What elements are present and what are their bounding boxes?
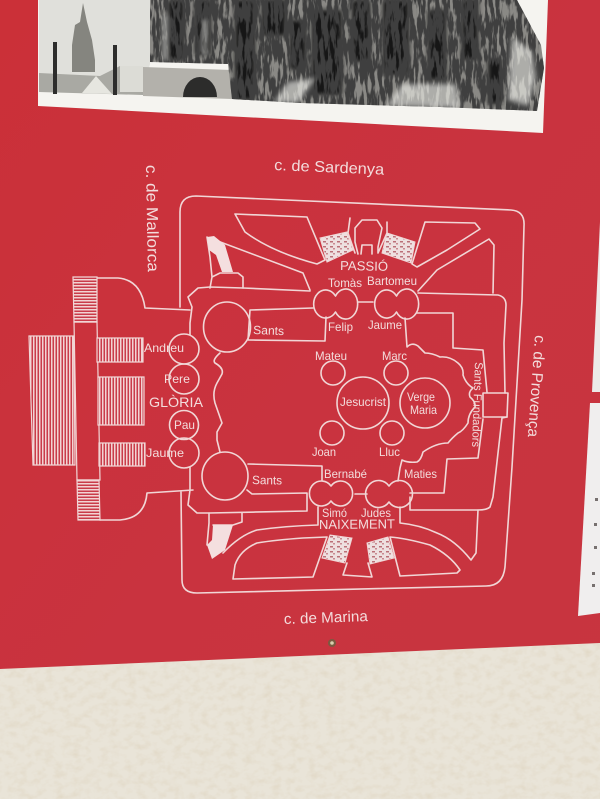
- apse undulating wall: [398, 318, 475, 481]
- apostle names: Bernabé: [324, 467, 367, 481]
- apostle names: Bartomeu: [367, 274, 417, 288]
- façade label: Naixement: NAIXEMENT: [319, 516, 395, 532]
- street names: [142, 157, 548, 628]
- tower pair: Bernabé and Simó: [309, 481, 353, 506]
- floor plan: [29, 196, 524, 593]
- south garden east: [390, 537, 460, 576]
- cloister curved ramps: [207, 236, 233, 559]
- south central tower: [343, 563, 372, 577]
- main church outline: north side: [188, 287, 507, 510]
- apostle names: Jaume: [368, 318, 402, 332]
- street and wall: [39, 42, 232, 99]
- sky: [39, 0, 152, 92]
- west entrance outline: [97, 278, 193, 520]
- stair block 2: [98, 377, 144, 425]
- stair block 1: [97, 338, 143, 362]
- site boundary: [180, 196, 524, 593]
- south garden west: [233, 537, 327, 579]
- central labels: Jesucrist: [340, 395, 387, 409]
- central circles: [320, 361, 450, 445]
- Naixement stair bands: [322, 535, 394, 564]
- apse label: Sants Fundadors: Sants Fundadors: [469, 362, 484, 447]
- apostle names: Felip: [328, 320, 353, 334]
- apostle names: Pere: [164, 372, 190, 386]
- etching of the basilica on white panel: [38, 0, 550, 133]
- central labels: Lluc: [379, 445, 400, 459]
- central labels: Verge: [407, 390, 435, 404]
- main church outline: south side: [188, 464, 322, 513]
- stair block 3: [99, 443, 145, 466]
- tower pair: Bartomeu and Jaume: [375, 289, 419, 319]
- sacristy square: [483, 393, 508, 417]
- right side white panels: [578, 222, 600, 616]
- entrance bar: [74, 322, 100, 480]
- Passió stair bands: [320, 232, 415, 263]
- central labels: Marc: [382, 349, 407, 363]
- apostle names: Tomàs: [328, 276, 362, 290]
- street label: Mallorca: c. de Mallorca: [142, 165, 161, 272]
- central labels: [312, 349, 437, 459]
- apostle names: Jaume: [146, 446, 184, 460]
- north east cloister wall: [418, 239, 494, 293]
- chapel circle south: [202, 452, 248, 500]
- chapel labels: [252, 323, 284, 488]
- stair north landing: [73, 277, 97, 322]
- central labels: Joan: [312, 445, 336, 459]
- distant spires: [72, 3, 95, 72]
- stair south landing: [77, 480, 100, 520]
- north west cloister: [207, 237, 310, 290]
- plan labels: [144, 258, 484, 532]
- chapel circle north: [204, 302, 250, 352]
- screw hole: [328, 639, 336, 647]
- apostle names: Pau: [174, 418, 195, 432]
- dark facade mass: [150, 0, 550, 112]
- north garden west: [235, 214, 325, 264]
- tower pair: Tomàs and Felip: [314, 289, 358, 319]
- plaster wall: [0, 640, 600, 799]
- apostle circles: [169, 334, 199, 468]
- central labels: Maria: [410, 403, 437, 417]
- chapel labels: Sants: [253, 323, 284, 338]
- chapel labels: Sants: [252, 473, 282, 488]
- tower pair: Judes and Maties: [366, 480, 412, 507]
- south east cloister wall: [400, 507, 478, 560]
- apostle names: Andreu: [144, 341, 184, 355]
- street label: Sardenya: c. de Sardenya: [274, 157, 385, 179]
- west wall undulation: [214, 353, 222, 452]
- apostle names: [144, 274, 437, 520]
- apostle names: Simó: [322, 506, 347, 520]
- façade label: Passió: PASSIÓ: [340, 258, 388, 274]
- apostle names: Judes: [361, 506, 391, 520]
- north garden east: [412, 222, 480, 267]
- south west cloister: [207, 507, 318, 553]
- façade label: Glòria: GLÒRIA: [149, 394, 204, 410]
- large stair: [29, 336, 75, 465]
- apostle names: Maties: [404, 467, 437, 481]
- north central tower: [348, 218, 387, 254]
- central labels: Mateu: [315, 349, 347, 363]
- tower connectors: [355, 302, 373, 494]
- Glòria steps: [29, 277, 145, 520]
- street label: Provença: c. de Provença: [524, 335, 548, 438]
- white panel: [38, 0, 548, 133]
- street label: Marina: c. de Marina: [284, 608, 369, 628]
